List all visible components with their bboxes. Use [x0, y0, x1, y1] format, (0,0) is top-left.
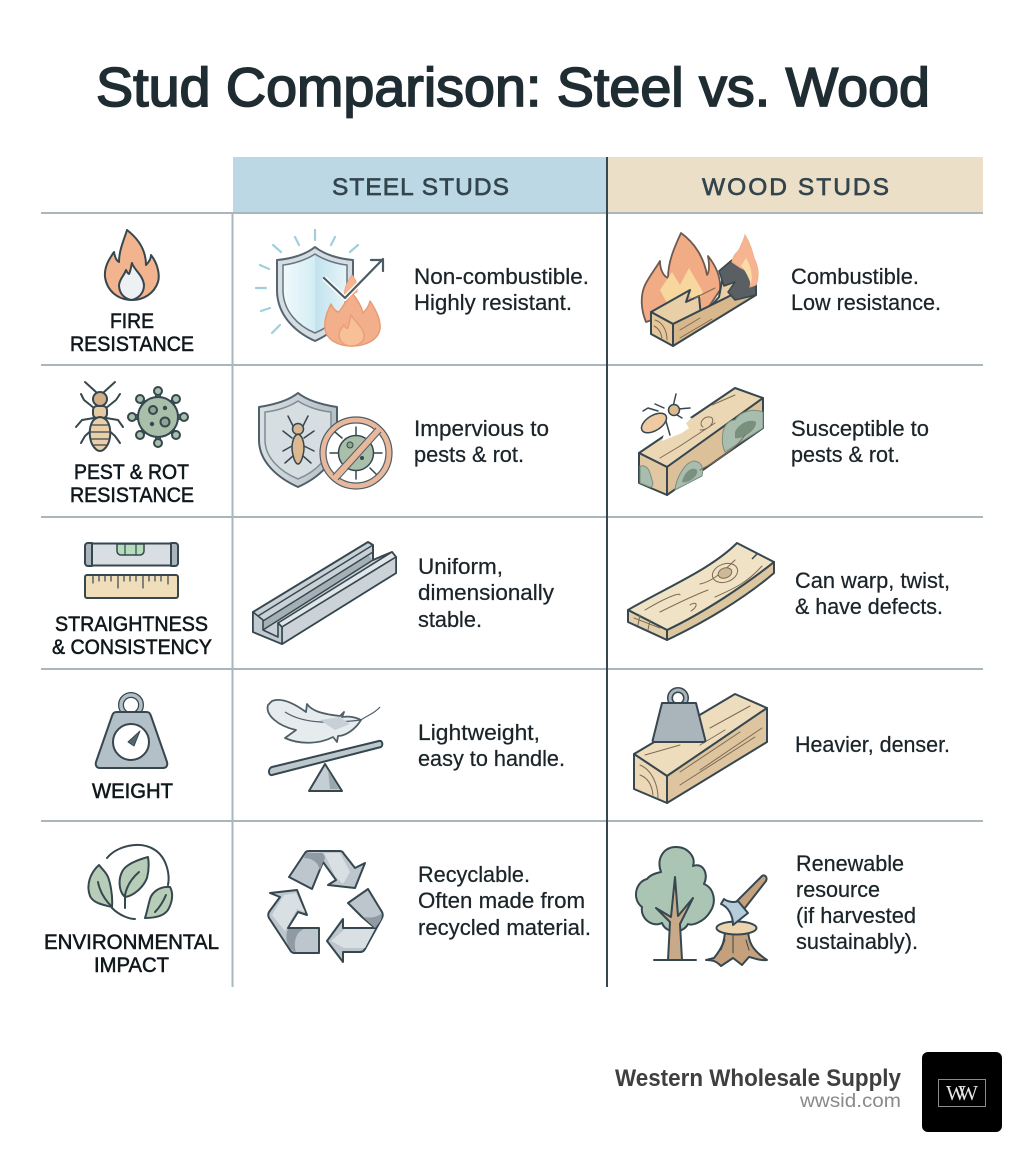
row: fire resistance	[70, 230, 941, 356]
text: steel pest resistance	[414, 416, 549, 467]
title: Stud Comparison: Steel vs. Wood	[96, 57, 930, 118]
icon: warped wood board	[628, 543, 774, 640]
label: fire resistance: RESISTANCE	[70, 333, 194, 356]
text: wood straightness: & have defects.	[795, 594, 943, 619]
label: environmental impact: ENVIRONMENTAL	[44, 931, 219, 954]
label: environmental impact	[44, 931, 219, 977]
row: weight	[92, 690, 950, 803]
text: steel straightness: dimensionally	[418, 580, 554, 605]
text: steel fire resistance	[414, 264, 589, 315]
column header: steel studs: STEEL STUDS	[332, 174, 509, 201]
text: steel environmental impact: Often made from	[418, 888, 585, 913]
text: steel straightness	[418, 554, 554, 632]
label: fire resistance: FIRE	[110, 310, 154, 333]
icon: tree, axe and stump	[636, 847, 767, 966]
icon: kettlebell weight with dial	[96, 695, 167, 768]
icon: recycling arrows	[268, 851, 383, 962]
brand name: Western Wholesale Supply	[615, 1065, 902, 1092]
icon: level and ruler	[85, 543, 178, 598]
label: pest and rot resistance: RESISTANCE	[70, 484, 194, 507]
label: straightness and consistency: STRAIGHTNESS	[55, 613, 208, 636]
text: steel environmental impact	[418, 862, 591, 940]
text: wood pest resistance: pests & rot.	[791, 442, 900, 467]
icon: shield with termite and no-mold sign	[259, 393, 392, 489]
text: steel fire resistance: Non-combustible.	[414, 264, 589, 289]
icon: heavy wood block with weight	[634, 690, 767, 803]
text: wood environmental impact: (if harvested	[796, 903, 916, 928]
text: wood fire resistance: Low resistance.	[791, 290, 941, 315]
brand url: wwsid.com	[799, 1091, 901, 1112]
text: steel environmental impact: recycled material.	[418, 915, 591, 940]
text: steel straightness: stable.	[418, 607, 482, 632]
text: wood pest resistance: Susceptible to	[791, 416, 929, 441]
icon: feather on balance	[268, 700, 382, 791]
label: straightness and consistency: & CONSISTENCY	[52, 636, 212, 659]
text: wood straightness: Can warp, twist,	[795, 568, 950, 593]
row: straightness and consistency	[52, 542, 950, 659]
text: wood environmental impact: Renewable	[796, 851, 904, 876]
logo: WW	[946, 1081, 978, 1105]
icon: three leaves in a circle	[88, 845, 172, 919]
text: steel fire resistance: Highly resistant.	[414, 290, 572, 315]
icon: rotting wood beam with termite	[638, 388, 763, 495]
icon: burning wood beam	[642, 233, 758, 346]
text: steel weight: easy to handle.	[418, 746, 565, 771]
text: wood fire resistance	[791, 264, 941, 315]
icon: flame	[105, 230, 159, 300]
label: fire resistance	[70, 310, 194, 356]
text: wood environmental impact	[796, 851, 918, 954]
text: wood fire resistance: Combustible.	[791, 264, 919, 289]
text: steel environmental impact: Recyclable.	[418, 862, 530, 887]
label: pest and rot resistance: PEST & ROT	[74, 461, 189, 484]
text: steel straightness: Uniform,	[418, 554, 503, 579]
icon: fire-protective steel shield	[256, 230, 383, 346]
text: steel weight: Lightweight,	[418, 720, 540, 745]
label: environmental impact: IMPACT	[94, 954, 169, 977]
row: pest and rot resistance	[70, 382, 929, 507]
text: steel weight	[418, 720, 565, 771]
text: steel pest resistance: pests & rot.	[414, 442, 524, 467]
icon: termite and mold spore	[76, 382, 188, 451]
column header: wood studs	[608, 157, 983, 213]
text: wood pest resistance	[791, 416, 929, 467]
text: steel pest resistance: Impervious to	[414, 416, 549, 441]
logo	[922, 1052, 1002, 1132]
text: wood environmental impact: sustainably).	[796, 929, 918, 954]
column header: steel studs	[233, 157, 607, 213]
text: wood straightness	[795, 568, 950, 619]
row: environmental impact	[44, 845, 918, 977]
icon: steel C-channel	[253, 542, 396, 644]
text: wood weight: Heavier, denser.	[795, 732, 950, 757]
column header: wood studs: WOOD STUDS	[702, 174, 889, 201]
text: wood environmental impact: resource	[796, 877, 880, 902]
footer brand	[615, 1052, 1002, 1132]
label: weight: WEIGHT	[92, 780, 173, 803]
label: straightness and consistency	[52, 613, 212, 659]
label: pest and rot resistance	[70, 461, 194, 507]
